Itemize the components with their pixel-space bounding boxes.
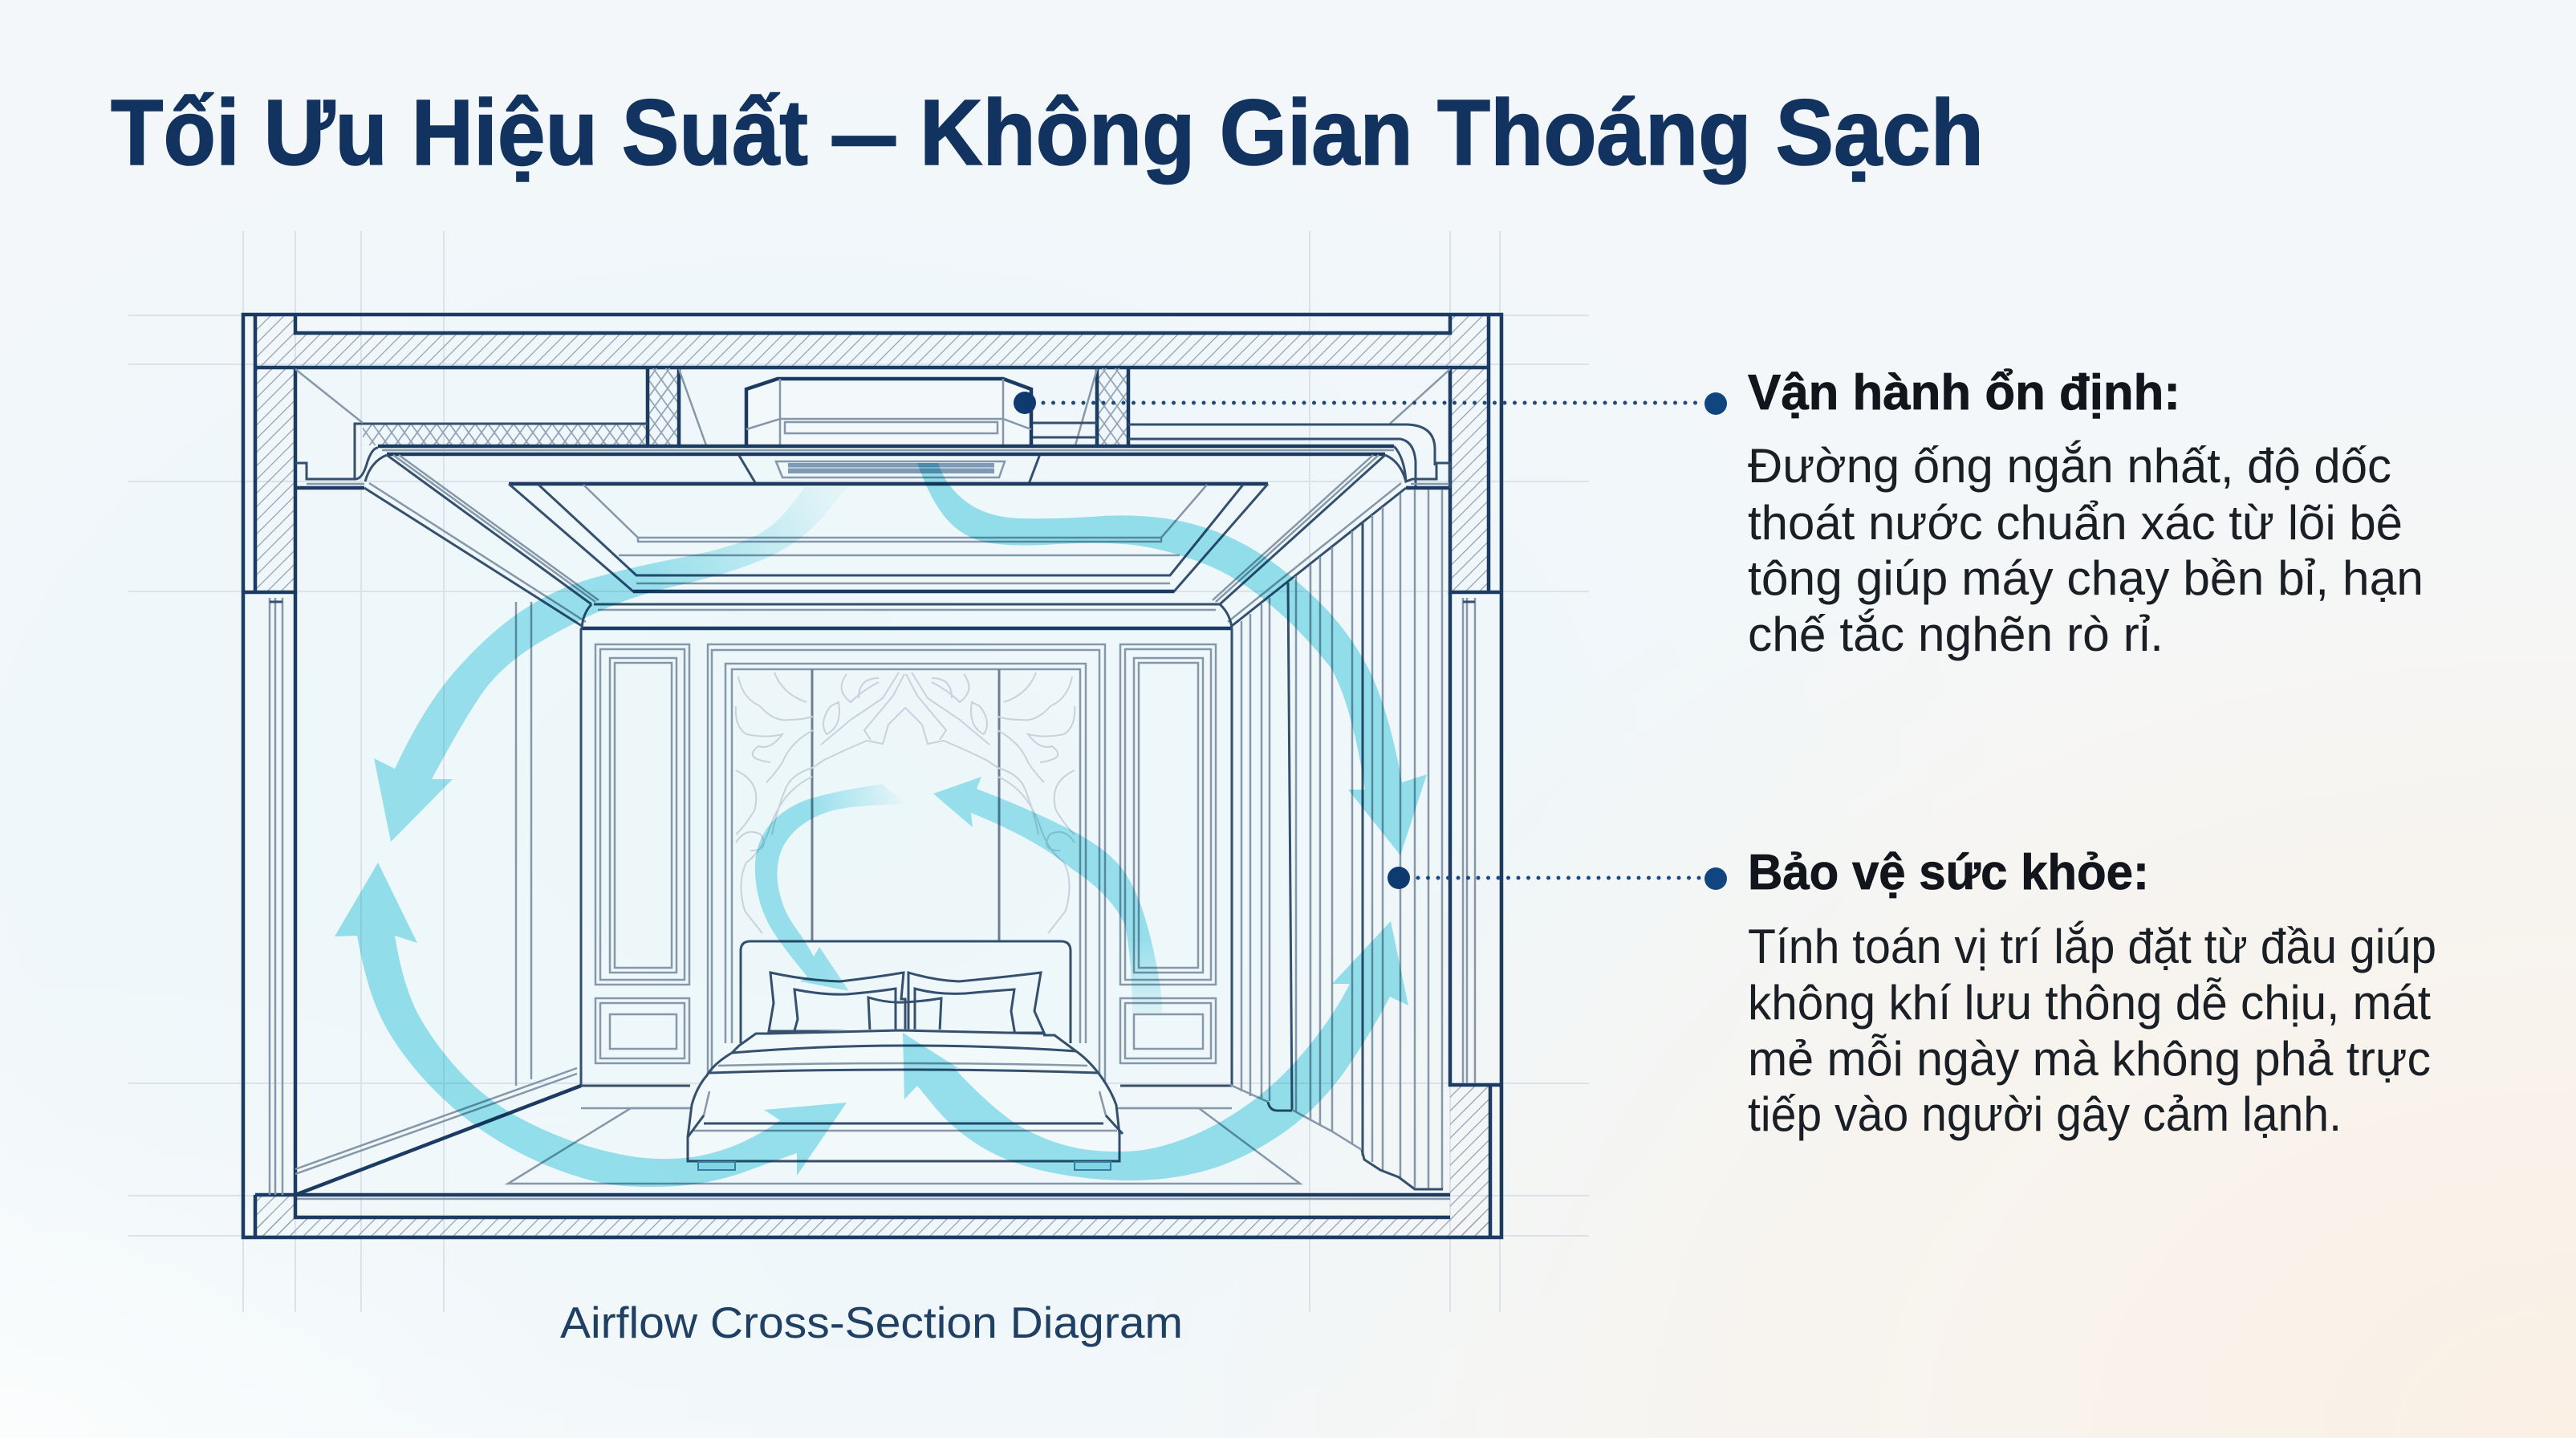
decorative arch ornament — [736, 672, 1075, 933]
text block: stable operation — [1748, 365, 2424, 661]
body: health protection — [1748, 920, 2436, 1141]
diagram: room cross-section — [243, 315, 1501, 1237]
body: health protection: Tính toán vị trí lắp đặt từ đầu giúp — [1748, 920, 2436, 973]
bed legs — [698, 1162, 735, 1170]
arrow: inner left loop over the headboard — [755, 784, 906, 991]
title: — — [832, 82, 896, 186]
back wall with panels — [516, 602, 1232, 1108]
arrow: bottom-left sweep to the bed — [335, 863, 847, 1187]
plenum: concrete columns and duct — [295, 368, 1450, 489]
body: stable operation: thoát nước chuẩn xác từ lõi bê — [1748, 496, 2403, 550]
arrow: bottom-right sweep under the bed — [903, 921, 1408, 1180]
title — [111, 80, 1984, 186]
body: stable operation: Đường ống ngắn nhất, độ dốc — [1748, 439, 2391, 493]
caption: Airflow Cross-Section Diagram — [560, 1298, 1183, 1347]
blueprint grid lines — [128, 231, 1589, 1312]
icon: ceiling cassette air conditioner — [738, 379, 1040, 484]
body: health protection: không khí lưu thông dễ chịu, mát — [1748, 976, 2431, 1030]
heading: health protection: Bảo vệ sức khỏe: — [1748, 845, 2149, 900]
pillows — [769, 973, 1044, 1035]
headboard — [741, 941, 1071, 1043]
left wall panels — [595, 644, 689, 1063]
callout leader: airflow to health protection — [1388, 867, 1727, 890]
right wall panels — [1120, 644, 1216, 1063]
bed with pillows — [688, 941, 1123, 1170]
arrow: top-left airflow from cassette — [374, 487, 847, 842]
heading: stable operation: Vận hành ổn định: — [1748, 365, 2180, 420]
title: Tối Ưu Hiệu Suất — [111, 80, 808, 185]
body: stable operation: chế tắc nghẽn rò rỉ. — [1748, 607, 2164, 661]
body: health protection: tiếp vào người gây cảm lạnh. — [1748, 1087, 2342, 1141]
body: stable operation — [1748, 439, 2424, 661]
callout leader: AC unit to stable operation — [1014, 392, 1727, 415]
tray ceiling moulding — [295, 446, 1450, 628]
bed legs — [1075, 1162, 1111, 1170]
floor, skirting and rug — [295, 1068, 1300, 1195]
body: stable operation: tông giúp máy chạy bền bỉ, hạn — [1748, 551, 2424, 605]
title: Không Gian Thoáng Sạch — [920, 80, 1984, 185]
body: health protection: mẻ mỗi ngày mà không phả trực — [1748, 1032, 2431, 1086]
airflow arrows — [335, 463, 1427, 1187]
center panel frame — [708, 644, 1105, 1086]
text block: health protection — [1748, 845, 2436, 1141]
arrow: inner right loop rising up the wall — [933, 777, 1162, 1013]
mattress and duvet — [688, 1029, 1119, 1161]
arrow: top-right airflow from cassette — [917, 463, 1427, 855]
building shell: hatched slabs and walls — [243, 315, 1501, 1237]
curtain on right side — [1230, 489, 1443, 1190]
